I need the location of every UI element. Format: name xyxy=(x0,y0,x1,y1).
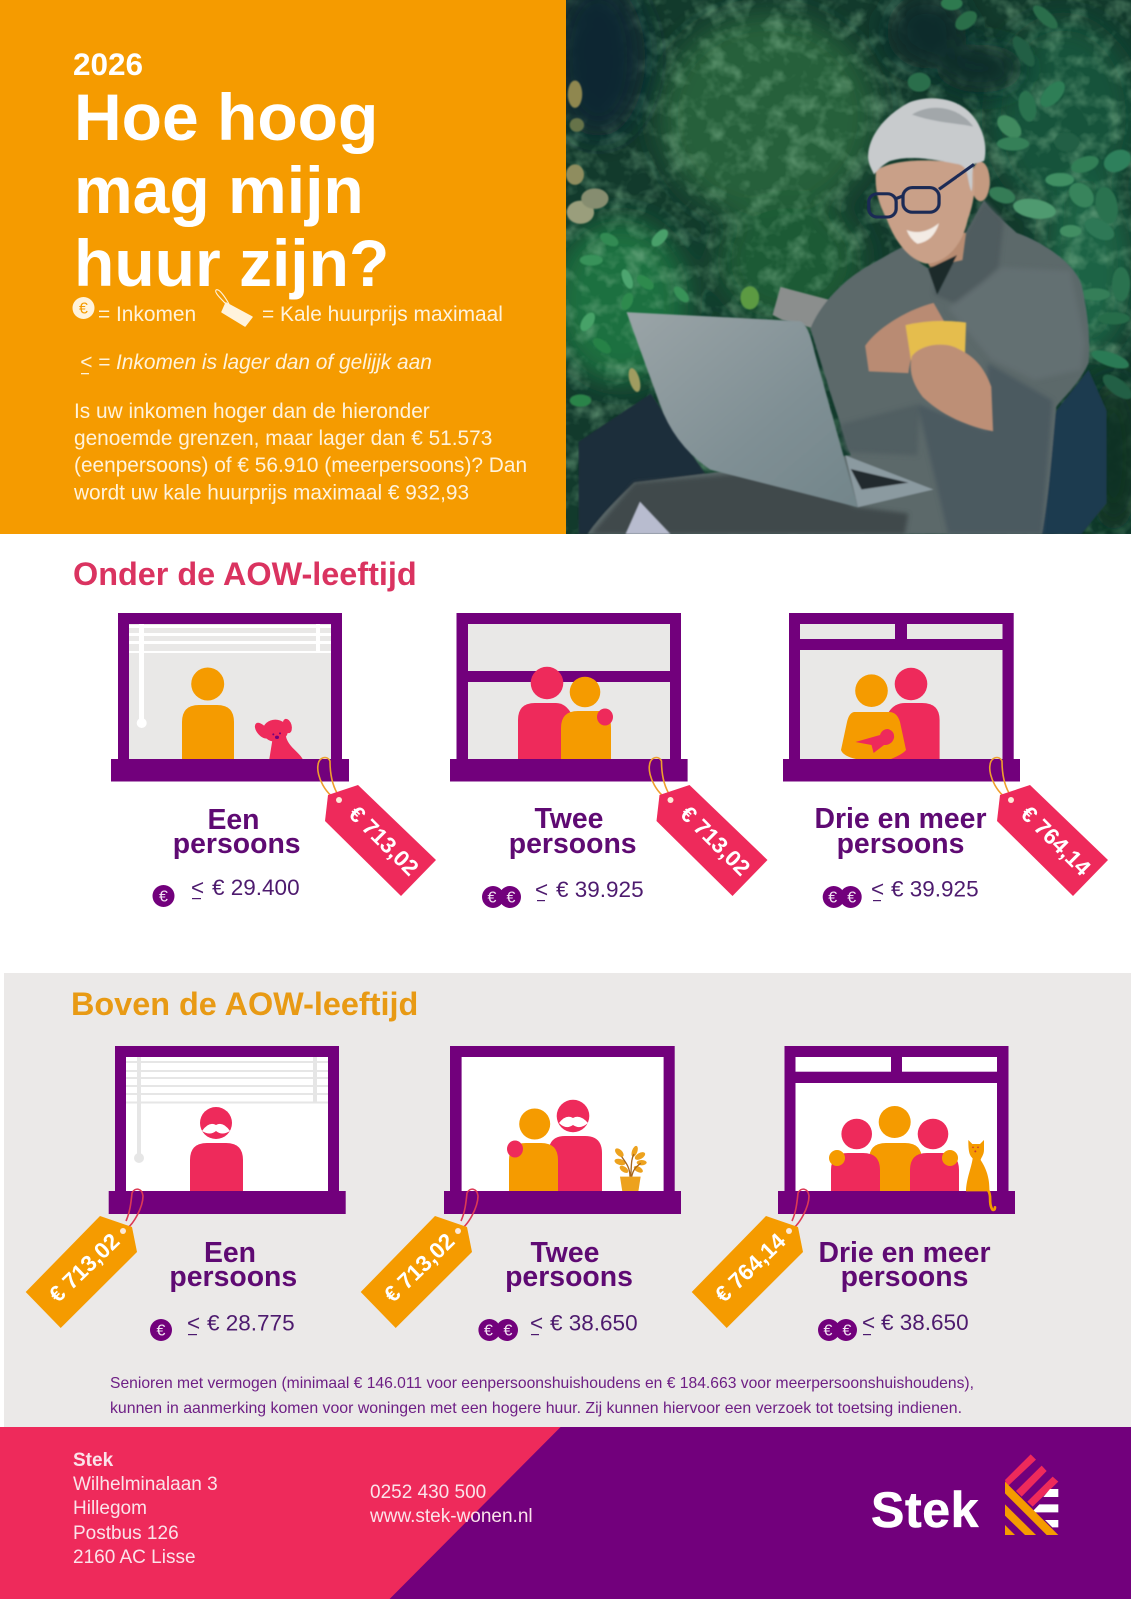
price tag: € 713,02 xyxy=(379,1228,460,1307)
trousers xyxy=(625,501,671,534)
photo: woman with laptop in garden xyxy=(552,0,1131,534)
price tag: € 713,02 xyxy=(675,801,755,881)
label: Een xyxy=(207,804,260,836)
window panes xyxy=(468,624,670,760)
window sill xyxy=(444,1191,681,1214)
legend: income label: = Inkomen xyxy=(98,303,196,326)
year: 2026 xyxy=(73,46,143,82)
label: Twee xyxy=(535,803,603,835)
income coins: € xyxy=(504,1322,513,1340)
intro paragraph: wordt uw kale huurprijs maximaal € 932,93 xyxy=(73,482,469,504)
income limit: € 28.775 xyxy=(207,1310,295,1336)
hair xyxy=(868,98,985,192)
window sill xyxy=(783,759,1020,782)
logo icon xyxy=(1005,1454,1058,1535)
window frame xyxy=(118,613,342,773)
card: twee persoons boven AOW xyxy=(361,1046,681,1341)
window sill xyxy=(111,759,349,782)
window sill xyxy=(450,759,688,782)
window frame xyxy=(456,613,681,773)
income coins xyxy=(482,886,521,908)
income coins xyxy=(823,886,862,908)
ear xyxy=(971,162,990,201)
window pane xyxy=(462,1057,664,1192)
label: persoons xyxy=(505,1261,633,1293)
income coins: € xyxy=(484,1322,493,1340)
price tag xyxy=(692,1189,809,1328)
address: Postbus 126 xyxy=(73,1523,179,1544)
label: persoons xyxy=(169,1261,297,1293)
persons xyxy=(829,1106,959,1192)
intro paragraph: genoemde grenzen, maar lager dan € 51.573 xyxy=(74,427,492,450)
card: drie en meer persoons boven AOW xyxy=(692,1046,1015,1341)
blinds xyxy=(129,624,331,728)
legend: price tag icon xyxy=(216,290,252,326)
income coins: € xyxy=(824,1322,833,1340)
legend: rent label: = Kale huurprijs maximaal xyxy=(262,303,503,326)
panel: above AOW background xyxy=(4,973,1131,1427)
income limit: < xyxy=(191,875,204,900)
card: twee persoons onder AOW xyxy=(450,613,768,908)
income limit: < xyxy=(871,876,884,902)
window pane xyxy=(126,1057,328,1192)
intro paragraph: (eenpersoons) of € 56.910 (meerpersoons)? Dan xyxy=(74,454,527,477)
label: Een xyxy=(204,1237,256,1269)
income coins xyxy=(818,1319,857,1341)
label: persoons xyxy=(509,828,637,860)
title: huur zijn? xyxy=(74,226,389,300)
income coins: € xyxy=(847,890,856,906)
label: persoons xyxy=(841,1261,968,1293)
cup xyxy=(905,320,967,361)
income coin: € xyxy=(159,888,168,906)
label: Drie en meer xyxy=(814,803,987,835)
persons xyxy=(507,1100,602,1192)
legend: less or equal: < = Inkomen is lager dan of gelijjk aan xyxy=(80,351,432,374)
neck xyxy=(912,233,966,267)
smile xyxy=(907,223,939,244)
icon: dog xyxy=(252,718,303,759)
price tag: € 713,02 xyxy=(344,801,423,881)
persons xyxy=(518,667,613,759)
glasses xyxy=(869,164,974,217)
window panes xyxy=(800,624,1002,760)
address: Stek xyxy=(73,1450,114,1471)
income limit: < xyxy=(187,1310,200,1336)
address: Hillegom xyxy=(73,1498,147,1519)
window frame xyxy=(784,1046,1008,1206)
card: drie en meer persoons onder AOW xyxy=(783,613,1108,908)
income coins xyxy=(478,1319,518,1341)
income coin xyxy=(150,1319,172,1341)
heading: under AOW: Onder de AOW-leeftijd xyxy=(73,556,417,592)
price tag xyxy=(318,758,436,896)
icon: potted plant xyxy=(613,1145,647,1192)
income coins: € xyxy=(843,1322,852,1340)
window pane xyxy=(129,624,331,760)
hand on chest xyxy=(865,303,944,373)
laptop lid xyxy=(627,312,858,507)
window sill xyxy=(778,1191,1015,1214)
footnote xyxy=(110,1375,974,1417)
intro paragraph: Is uw inkomen hoger dan de hieronder xyxy=(74,400,430,423)
income coins: € xyxy=(488,890,497,906)
face xyxy=(876,160,975,264)
blinds xyxy=(126,1057,328,1163)
price tag xyxy=(361,1189,478,1328)
blanket main xyxy=(588,200,1089,534)
footer background red xyxy=(0,1427,561,1599)
legend: income coin xyxy=(72,297,94,319)
heading: above AOW: Boven de AOW-leeftijd xyxy=(71,986,418,1022)
price tag: € 764,14 xyxy=(710,1228,791,1307)
label: Drie en meer xyxy=(818,1237,991,1269)
price tag xyxy=(649,758,768,896)
income limit: < xyxy=(862,1310,875,1335)
orange background xyxy=(0,0,566,534)
contact: www.stek-wonen.nl xyxy=(369,1506,533,1527)
title: Hoe hoog xyxy=(74,80,378,154)
price tag: € 764,14 xyxy=(1016,801,1096,881)
laptop base xyxy=(845,455,934,507)
price tag: € 713,02 xyxy=(44,1228,125,1307)
logo text: Stek xyxy=(871,1482,979,1538)
label: persoons xyxy=(837,828,964,860)
income limit: € 39.925 xyxy=(556,877,644,902)
contact: 0252 430 500 xyxy=(370,1482,486,1503)
panel: header xyxy=(0,0,566,534)
income limit: € 38.650 xyxy=(550,1310,638,1336)
income limit: € 29.400 xyxy=(212,875,300,900)
price tag xyxy=(26,1189,143,1328)
footnote: Senioren met vermogen (minimaal € 146.011 voor eenpersoonshuishoudens en € 184.663 voor meerpersoonshuishoudens), xyxy=(110,1375,974,1392)
income coins: € xyxy=(828,890,837,906)
price tag xyxy=(990,758,1108,896)
income coin: € xyxy=(157,1322,166,1340)
hand with cup xyxy=(911,345,993,431)
income limit: € 39.925 xyxy=(891,876,979,902)
income limit: € 38.650 xyxy=(881,1310,969,1335)
window panes xyxy=(796,1057,997,1192)
window frame xyxy=(115,1046,339,1206)
label: persoons xyxy=(173,828,301,860)
icon: cat xyxy=(966,1140,995,1210)
address: Wilhelminalaan 3 xyxy=(73,1474,218,1495)
persons with baby xyxy=(841,668,940,759)
card: een persoons onder AOW xyxy=(111,613,436,907)
income limit: < xyxy=(530,1310,543,1336)
person with moustache xyxy=(190,1107,243,1192)
legend: income coin: € xyxy=(79,300,88,318)
chair xyxy=(578,394,704,534)
cushion xyxy=(773,287,834,329)
income limit: < xyxy=(535,877,548,902)
address: 2160 AC Lisse xyxy=(73,1547,196,1568)
window sill xyxy=(109,1191,346,1214)
window frame xyxy=(450,1046,675,1206)
label: Twee xyxy=(531,1237,599,1269)
window frame xyxy=(789,613,1014,773)
footer background purple xyxy=(0,1427,1131,1599)
panel: footer xyxy=(0,1427,1131,1599)
income coin xyxy=(152,885,174,907)
person xyxy=(182,668,234,759)
income coins: € xyxy=(507,890,516,906)
title: mag mijn xyxy=(74,153,364,227)
card: een persoons boven AOW xyxy=(26,1046,346,1341)
footnote: kunnen in aanmerking komen voor woningen met een hogere huur. Zij kunnen hiervoor een verzoek tot toetsing indienen. xyxy=(110,1400,962,1417)
